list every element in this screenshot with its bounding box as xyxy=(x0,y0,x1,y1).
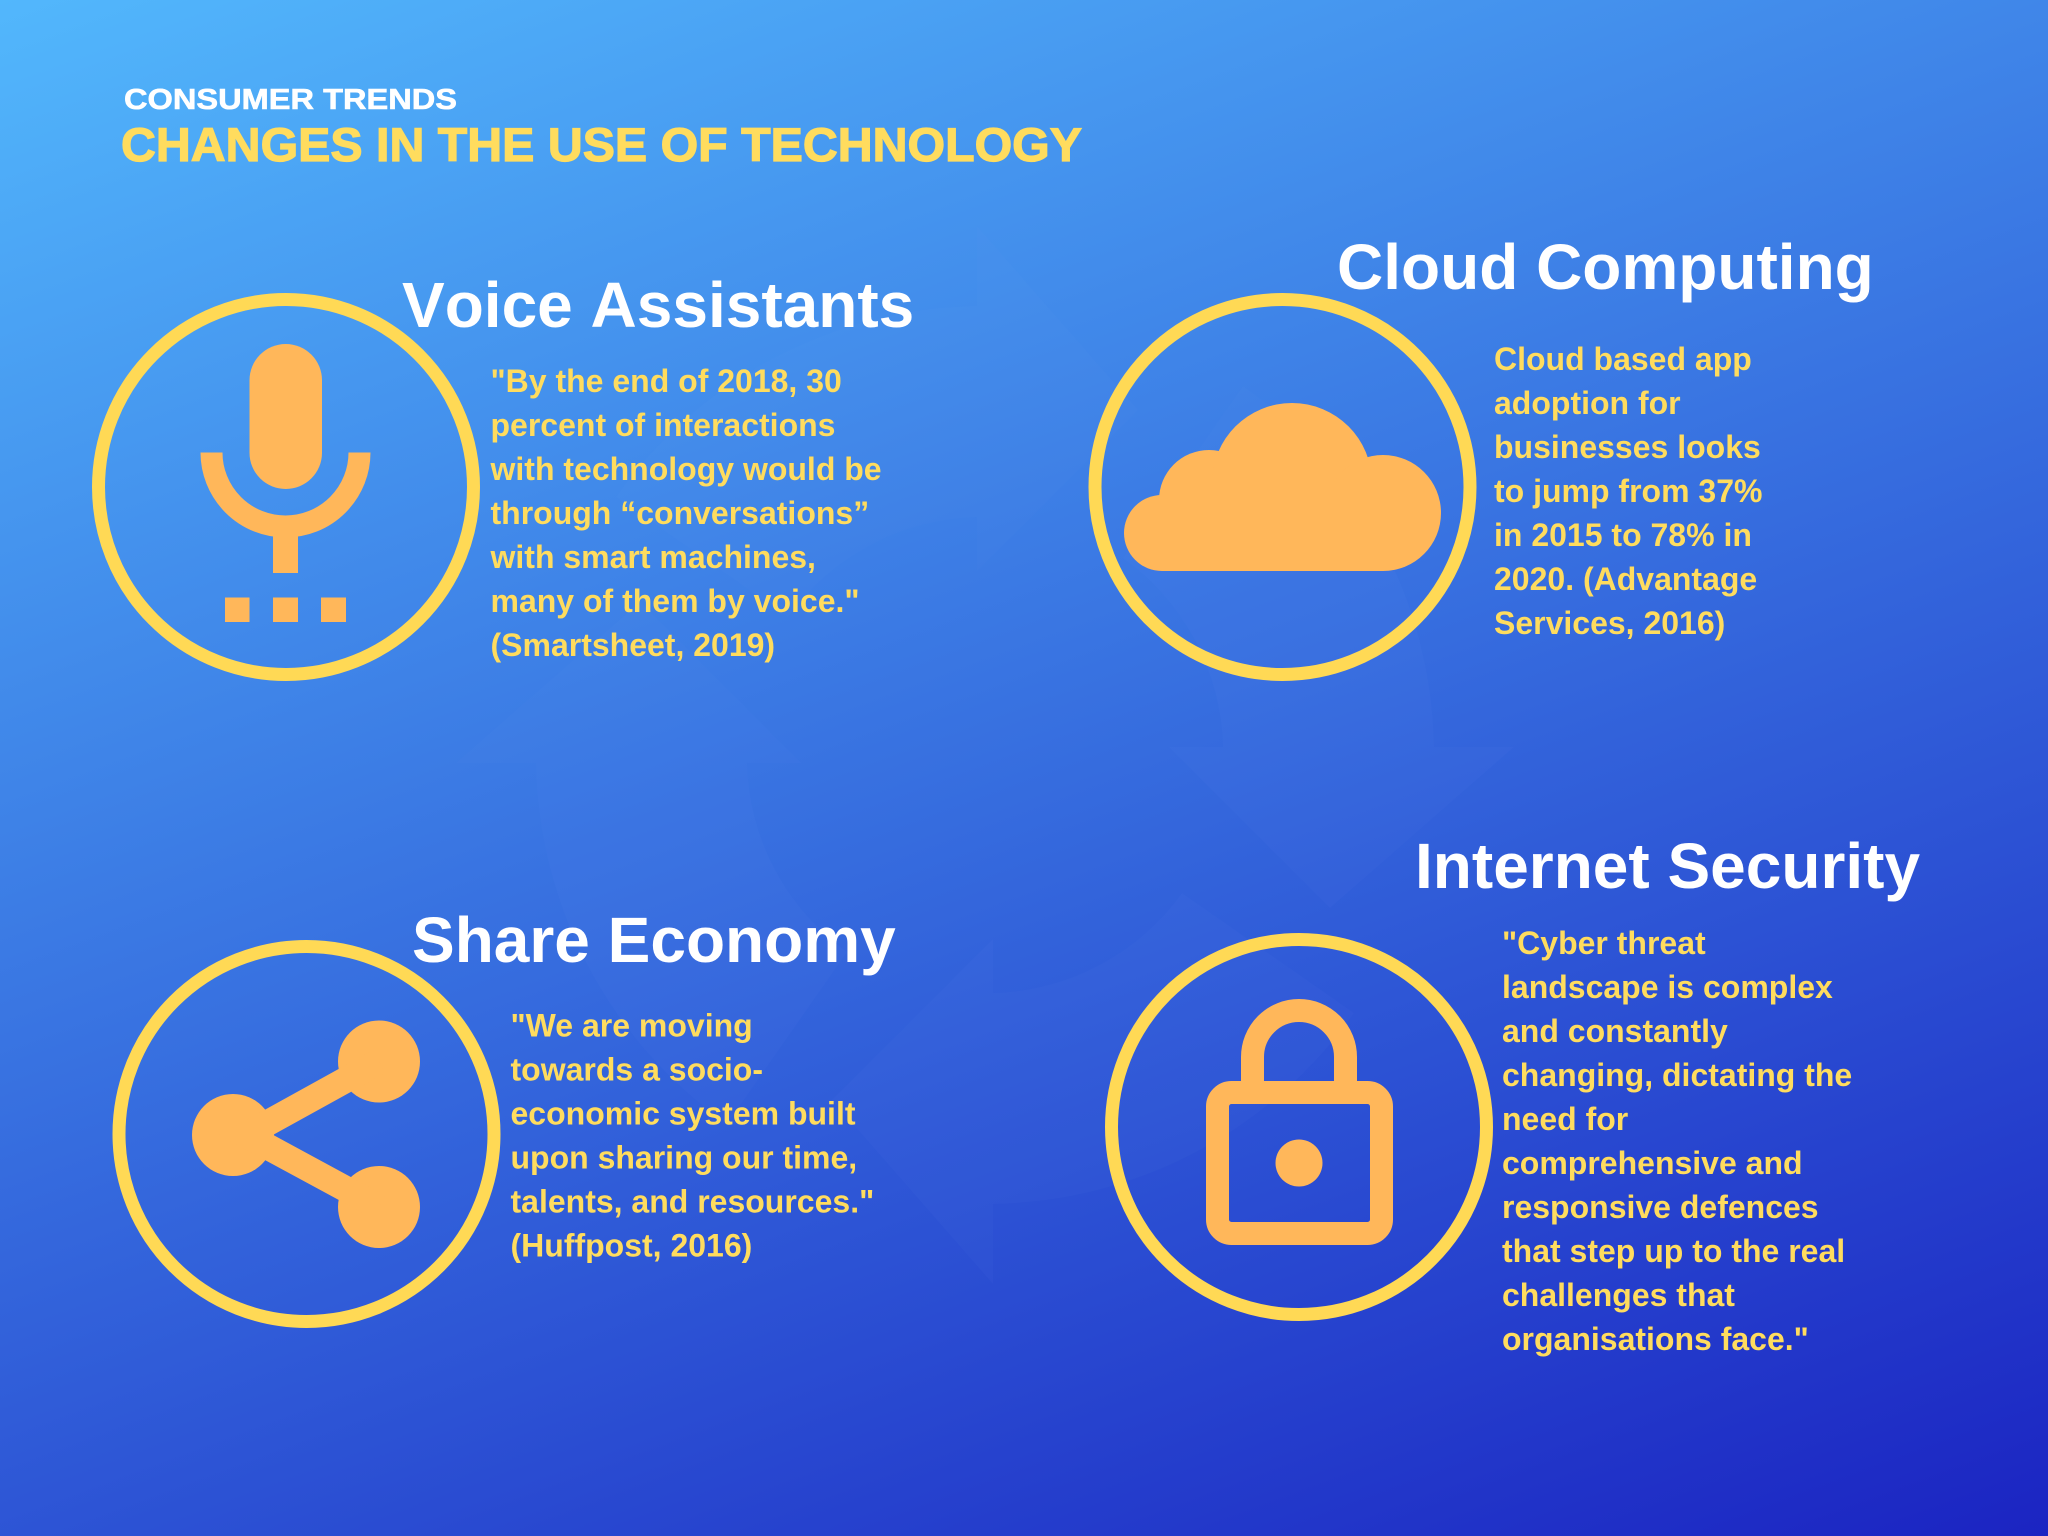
icon: microphone in ring xyxy=(98,300,474,674)
quote: internet security: organisations face." xyxy=(1502,1321,1809,1357)
heading: internet security: Internet Security xyxy=(1415,830,1920,902)
icon: share nodes in ring xyxy=(119,946,494,1322)
quote: cloud computing: Services, 2016) xyxy=(1494,605,1725,641)
watermark: circular arrows xyxy=(456,226,1514,1284)
quote: share economy: towards a socio- xyxy=(510,1052,763,1088)
icon: padlock in ring xyxy=(1112,940,1486,1314)
quote: internet security: and constantly xyxy=(1502,1013,1728,1049)
kicker: consumer trends: CONSUMER TRENDS xyxy=(124,84,457,116)
quote: voice assistants: (Smartsheet, 2019) xyxy=(490,627,775,663)
panel: cloud computing xyxy=(1095,231,1874,674)
quote: share economy: "We are moving xyxy=(510,1008,753,1044)
quote: internet security: that step up to the real xyxy=(1502,1233,1845,1269)
quote: internet security: changing, dictating the xyxy=(1502,1057,1852,1093)
heading: cloud computing: Cloud Computing xyxy=(1337,231,1874,303)
quote: share economy: economic system built xyxy=(510,1096,856,1132)
quote: internet security: landscape is complex xyxy=(1502,969,1833,1005)
quote: voice assistants: through “conversations” xyxy=(490,495,869,531)
title: CHANGES IN THE USE OF TECHNOLOGY xyxy=(121,118,1082,171)
quote: cloud computing: in 2015 to 78% in xyxy=(1494,517,1752,553)
quote: internet security: responsive defences xyxy=(1502,1189,1819,1225)
quote: voice assistants: "By the end of 2018, 30 xyxy=(490,363,842,399)
panel: voice assistants xyxy=(98,269,914,674)
quote: cloud computing: businesses looks xyxy=(1494,429,1761,465)
quote: internet security: "Cyber threat xyxy=(1502,925,1706,961)
heading: voice assistants: Voice Assistants xyxy=(402,269,914,341)
quote: internet security: comprehensive and xyxy=(1502,1145,1803,1181)
quote: share economy: talents, and resources." xyxy=(510,1184,874,1220)
quote: cloud computing: to jump from 37% xyxy=(1494,473,1762,509)
quote: internet security: challenges that xyxy=(1502,1277,1735,1313)
heading: share economy: Share Economy xyxy=(412,904,896,976)
quote: cloud computing: adoption for xyxy=(1494,385,1681,421)
quote: voice assistants: with technology would be xyxy=(490,451,882,487)
quote: cloud computing: 2020. (Advantage xyxy=(1494,561,1757,597)
quote: voice assistants: with smart machines, xyxy=(490,539,816,575)
icon: cloud in ring xyxy=(1095,300,1470,674)
quote: share economy: upon sharing our time, xyxy=(510,1140,857,1176)
panel: internet security xyxy=(1112,830,1920,1357)
quote: share economy: (Huffpost, 2016) xyxy=(510,1228,752,1264)
header xyxy=(121,84,1082,171)
quote: voice assistants: many of them by voice." xyxy=(490,583,860,619)
quote: cloud computing: Cloud based app xyxy=(1494,341,1752,377)
panel: share economy xyxy=(119,904,896,1322)
quote: voice assistants: percent of interactions xyxy=(490,407,835,443)
quote: internet security: need for xyxy=(1502,1101,1628,1137)
